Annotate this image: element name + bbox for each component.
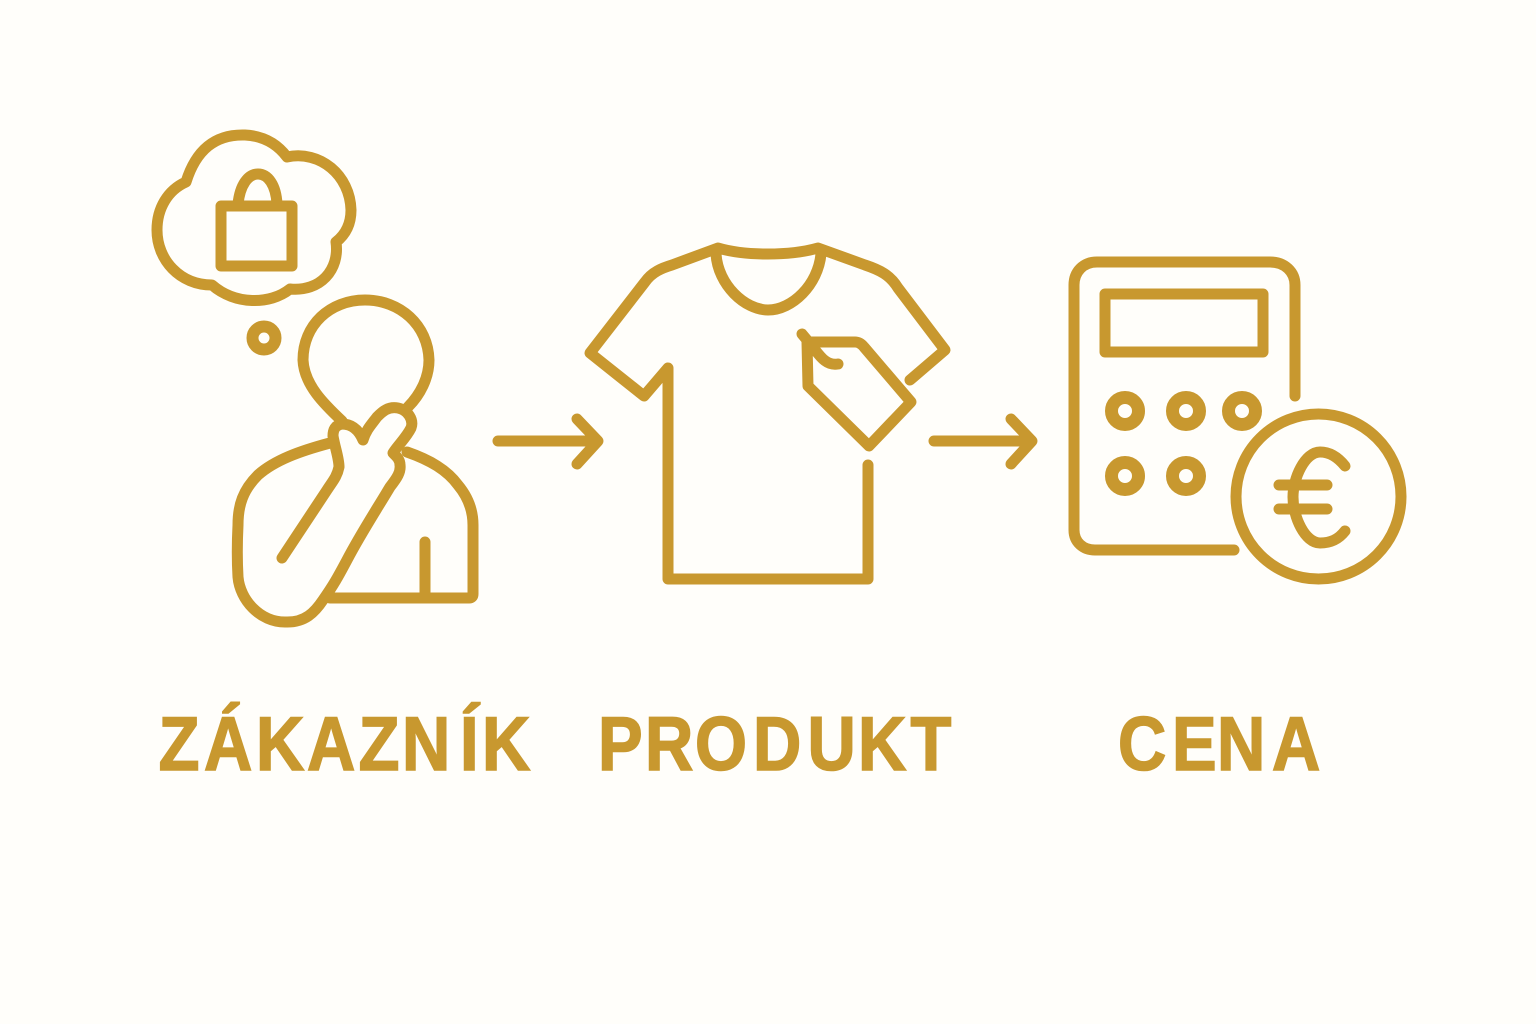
icon: calculator with euro coin	[1074, 262, 1401, 579]
label: product: PRODUKT	[598, 702, 951, 787]
icon: t-shirt with price tag	[590, 248, 945, 579]
icon: person shoulder and arm	[330, 452, 473, 598]
icon: thought cloud	[157, 135, 351, 301]
icon: calculator body	[1074, 262, 1295, 550]
label: price: CENA	[1118, 702, 1320, 787]
icon: customer thinking about a shopping bag	[157, 135, 473, 622]
icon: euro symbol	[1279, 452, 1345, 543]
arrow: product to price	[934, 419, 1032, 464]
icon: person body	[237, 408, 412, 622]
arrow: customer to product	[498, 419, 598, 464]
icon: shopping bag	[221, 174, 292, 266]
icon: euro coin	[1236, 414, 1401, 579]
icon: calculator buttons	[1112, 398, 1256, 490]
icon: price tag	[802, 334, 911, 446]
icon: person head	[303, 300, 429, 421]
icon: thought bubble dot	[252, 326, 276, 350]
label: customer: ZÁKAZNÍK	[159, 702, 531, 787]
icon: calculator display	[1105, 294, 1263, 352]
icon: t-shirt	[590, 248, 945, 579]
